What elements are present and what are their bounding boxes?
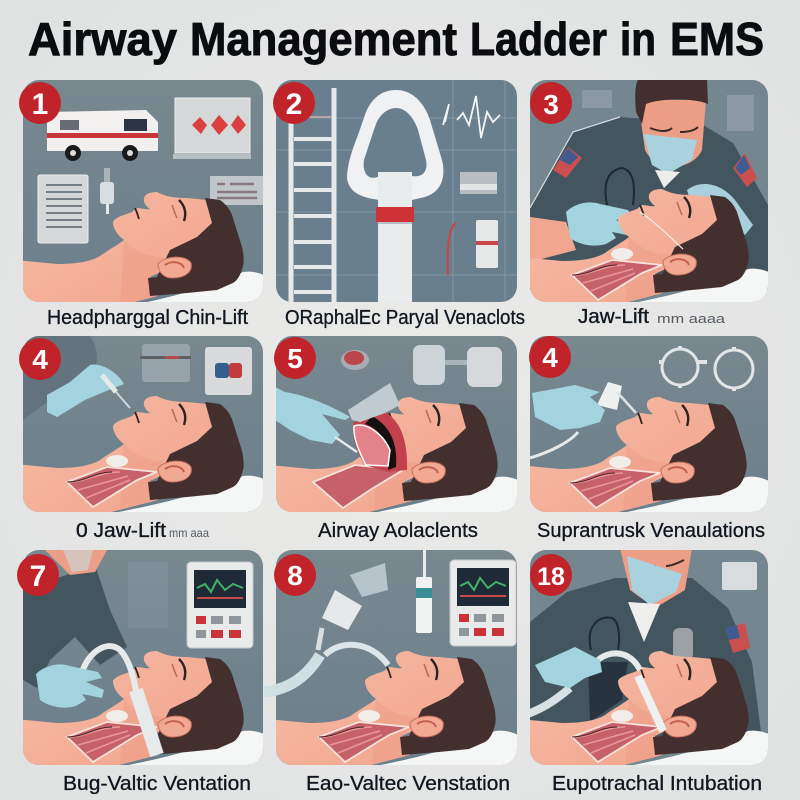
medic face <box>45 550 107 575</box>
number badge 1 <box>19 82 61 124</box>
icon: translucent mask <box>350 563 388 597</box>
icon: ring left <box>659 346 707 388</box>
label 3 <box>578 306 726 328</box>
ghost device <box>128 562 168 628</box>
icon: monitor <box>187 562 253 648</box>
icon: red tube <box>448 223 456 275</box>
title: Airway <box>28 13 177 65</box>
label 4 <box>76 520 209 542</box>
icon: connector <box>445 360 467 365</box>
label 5: Airway Aolaclents <box>318 520 478 542</box>
number badge 8: 8 <box>287 560 303 591</box>
icon: tube <box>82 646 157 755</box>
number badge 4 <box>19 338 61 380</box>
panel 9: endotracheal intubation <box>520 548 771 789</box>
dark gap behind hand <box>588 662 628 722</box>
icon: info card <box>210 176 263 205</box>
label 2: ORaphalEc Paryal Venaclots <box>285 307 525 329</box>
patient with neck anatomy <box>267 651 518 789</box>
panel 1: head tilt chin lift <box>19 80 263 302</box>
number badge 10 <box>530 554 572 596</box>
icon: corrugated tube <box>264 655 320 692</box>
icon: wall monitor <box>173 98 251 159</box>
patient with neck anatomy <box>520 651 771 789</box>
icon: monitor <box>450 560 516 646</box>
number badge 7: 7 <box>30 560 46 593</box>
icon: medicine box <box>476 220 498 268</box>
label 9: Eupotrachal Intubation <box>552 773 762 795</box>
icon: glove and instrument <box>530 382 636 458</box>
icon: glove and tube <box>525 647 640 715</box>
icon: ladder <box>291 88 334 302</box>
icon: ambulance <box>47 110 158 161</box>
icon: small device <box>341 350 369 370</box>
label 3: Jaw-Lift <box>578 306 649 328</box>
medic <box>530 78 768 290</box>
label 7: Bug-Valtic Ventation <box>63 773 251 795</box>
patient with neck anatomy <box>530 189 768 302</box>
icon: glove with instrument <box>47 364 130 417</box>
icon: mask right <box>467 347 502 387</box>
airway cross section <box>353 408 407 472</box>
number badge 4: 4 <box>32 344 48 375</box>
icon: airway mask <box>347 90 443 302</box>
label 3: mm aaaa <box>657 311 726 326</box>
patient with neck anatomy <box>15 651 266 789</box>
label 1: Headpharggal Chin-Lift <box>47 307 248 329</box>
neck anatomy <box>313 465 403 508</box>
icon: glove <box>275 387 357 452</box>
medic <box>23 565 127 688</box>
title: Management <box>190 13 457 65</box>
icon: sticker <box>722 562 757 590</box>
title <box>28 13 764 65</box>
number badge 7 <box>17 554 59 596</box>
icon: device <box>140 344 191 382</box>
icon: translucent mask <box>348 383 400 422</box>
icon: mask left <box>413 345 445 385</box>
icon: glove <box>36 664 104 708</box>
panel 8: bag-valve ventilation <box>264 548 518 789</box>
panel 7: bag-valve ventilation <box>17 550 263 765</box>
patient <box>276 397 517 512</box>
icon: tube connector <box>318 590 388 665</box>
label 4: 0 Jaw-Lift <box>76 520 166 542</box>
patient <box>23 192 263 302</box>
number badge 8 <box>274 554 316 596</box>
label 6: Suprantrusk Venaulations <box>537 520 765 542</box>
number badge 1: 1 <box>32 88 48 121</box>
panel 3: jaw lift <box>530 80 768 302</box>
ghost icons <box>582 90 754 131</box>
title: EMS <box>670 13 764 65</box>
panel 6: supraglottic ventilation <box>529 336 768 512</box>
number badge 3 <box>530 82 572 124</box>
number badge 4: 4 <box>542 342 558 373</box>
panel 4: jaw lift with instrument <box>19 336 263 512</box>
patient with neck anatomy <box>530 397 768 512</box>
icon: ring right <box>715 347 753 391</box>
title: in <box>620 13 656 65</box>
medic sleeve <box>23 336 97 420</box>
panel 2: oropharyngeal airway <box>273 80 517 302</box>
number badge 2 <box>273 82 315 124</box>
icon: monitor <box>205 347 252 395</box>
panel 5: airway adjuncts <box>274 336 517 512</box>
patient with neck anatomy <box>23 396 263 512</box>
icon: clipboard <box>38 175 88 243</box>
number badge 2: 2 <box>286 88 302 121</box>
number badge 5 <box>274 337 316 379</box>
number badge 10: 18 <box>537 563 565 591</box>
title: Ladder <box>470 13 607 65</box>
icon: cylinder device <box>416 548 432 633</box>
icon: device <box>460 172 497 194</box>
number badge 4 <box>529 336 571 378</box>
label 4: mm aaa <box>169 526 209 540</box>
icon: ECG trace <box>443 96 500 138</box>
label 8: Eao-Valtec Venstation <box>306 773 510 795</box>
number badge 5: 5 <box>287 343 303 374</box>
number badge 3: 3 <box>543 89 559 120</box>
icon: IV bottle <box>100 168 114 214</box>
medic <box>530 548 762 740</box>
